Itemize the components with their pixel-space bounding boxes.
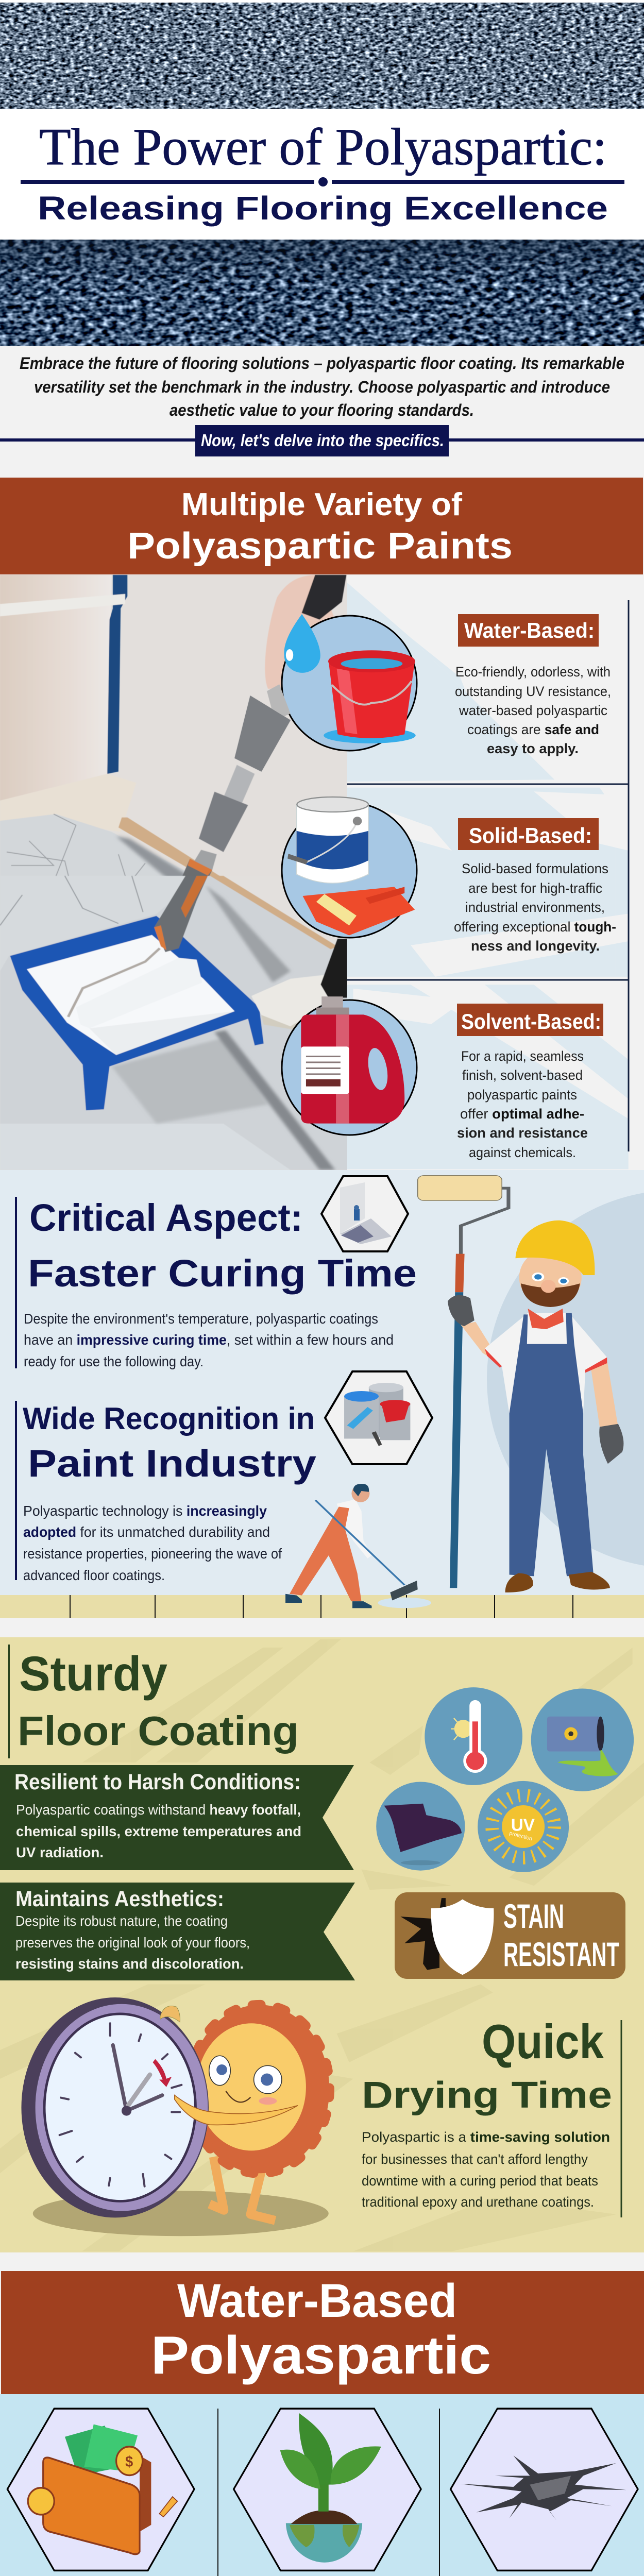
text: solvent-based: polyaspartic paints (467, 1087, 577, 1103)
intro text: aesthetic value to your flooring standards. (170, 401, 474, 419)
text: solvent-based: offer optimal adhe- (460, 1106, 584, 1122)
badge: stain resistant: STAIN (503, 1897, 564, 1935)
hero photo: bottom stone texture (0, 240, 644, 346)
icon: bucket with water (282, 614, 417, 751)
text: solid-based: offering exceptional tough- (454, 919, 616, 935)
text: solvent-based (457, 1048, 588, 1160)
item: solid-based (282, 797, 616, 954)
badge: stain resistant (395, 1892, 625, 1979)
ribbon: resilient to harsh conditions: Polyaspartic coatings withstand heavy footfall, (16, 1802, 301, 1818)
text: quick drying time: for businesses that can't afford lengthy (362, 2151, 588, 2167)
banner: multiple variety: Multiple Variety of (181, 487, 462, 522)
heading: critical aspect (15, 1196, 417, 1368)
label: solid-based (458, 818, 599, 850)
heading: quick drying time: Drying Time (362, 2075, 612, 2116)
text: wide recognition: advanced floor coatings. (23, 1567, 165, 1583)
divider with specifics label: Now, let's delve into the specifics. (201, 431, 444, 450)
text: solid-based: Solid-based formulations (462, 861, 608, 876)
icon: thermometer (425, 1687, 522, 1785)
banner: multiple variety: Polyaspartic Paints (127, 526, 513, 567)
label: water-based: Water-Based: (464, 618, 595, 642)
photo: roller in paint tray (0, 575, 347, 1170)
heading: wide recognition: Wide Recognition in (23, 1401, 315, 1436)
text: water-based (455, 664, 611, 756)
text: solvent-based: against chemicals. (469, 1145, 576, 1160)
icon: red bottle (282, 996, 417, 1135)
title panel (0, 109, 644, 240)
decorative circle (487, 1190, 644, 1568)
text: water-based: easy to apply. (487, 741, 579, 756)
text: wide recognition (23, 1503, 282, 1583)
illustration: worker mopping (285, 1484, 431, 1608)
divider with specifics label (0, 425, 644, 456)
text: solid-based (454, 861, 616, 954)
label: solvent-based (457, 1004, 603, 1036)
ribbon: maintains aesthetics: preserves the original look of your floors, (15, 1935, 250, 1951)
clock (21, 1997, 298, 2217)
text: water-based: water-based polyaspartic (459, 703, 607, 718)
roller grip over circle (234, 685, 291, 772)
painter head with helmet (515, 1221, 595, 1307)
column: environmental-friendly (227, 2409, 433, 2576)
text: water-based: outstanding UV resistance, (455, 684, 611, 699)
icon: UV protection: protection (509, 1831, 533, 1842)
floor strip (0, 1595, 644, 1618)
text: wide recognition: resistance properties, pioneering the wave of (23, 1546, 282, 1562)
ribbon: maintains aesthetics (0, 1883, 355, 1980)
label: water-based (458, 614, 599, 647)
column: less sturdy (451, 2409, 638, 2576)
ribbon: maintains aesthetics: resisting stains and discoloration. (15, 1956, 244, 1972)
heading: wide recognition: Paint Industry (28, 1442, 316, 1485)
item: water-based (282, 614, 611, 756)
heading: sturdy floor coating: Floor Coating (18, 1708, 299, 1754)
icon: hexagon worker in room (321, 1176, 408, 1251)
ribbon: resilient to harsh conditions: Resilient to Harsh Conditions: (14, 1770, 301, 1794)
heading: quick drying time: Quick (482, 2014, 604, 2069)
illustration: sun and clock (21, 1997, 329, 2236)
heading: wide recognition (15, 1401, 316, 1580)
text: solvent-based: finish, solvent-based (462, 1067, 583, 1083)
icon: plant on globe (234, 2409, 421, 2570)
text: quick drying time: Polyaspartic is a time-saving solution (362, 2129, 610, 2145)
ribbon: resilient to harsh conditions: UV radiation. (16, 1844, 104, 1860)
illustration: painter with roller (418, 1176, 623, 1592)
item: solvent-based (282, 996, 603, 1160)
text: water-based: Eco-friendly, odorless, with (455, 664, 611, 680)
text: solvent-based: For a rapid, seamless (461, 1048, 584, 1064)
banner: water-based polyaspartic: Polyaspartic (151, 2326, 491, 2385)
text: quick drying time (362, 2129, 610, 2210)
text: wide recognition: Polyaspartic technology is increasingly (23, 1503, 267, 1519)
text: solid-based: are best for high-traffic (468, 880, 602, 896)
icon: UV protection (478, 1781, 569, 1872)
panel: curing time and recognition (0, 1170, 644, 1618)
icon: floor crack (451, 2409, 638, 2570)
heading: sturdy floor coating (8, 1645, 299, 1758)
text: water-based: coatings are safe and (467, 722, 599, 737)
label: solvent-based: Solvent-Based: (461, 1009, 601, 1033)
panel: paint types (282, 575, 644, 1170)
painter roller (418, 1176, 509, 1588)
icon: wallet: $ (125, 2453, 133, 2470)
text: quick drying time: traditional epoxy and urethane coatings. (362, 2194, 594, 2210)
column: cost-effective (3, 2409, 206, 2576)
icon: UV protection: UV (511, 1816, 535, 1835)
text: critical aspect: have an impressive curing time, set within a few hours and (24, 1332, 394, 1348)
icon: wallet (7, 2409, 194, 2570)
text: critical aspect (24, 1311, 394, 1369)
text: solvent-based: sion and resistance (457, 1125, 588, 1141)
icons: hazard circles (376, 1687, 634, 1872)
title line 1: The Power of Polyaspartic: (39, 118, 607, 176)
heading: critical aspect: Critical Aspect: (29, 1196, 303, 1239)
ribbon: resilient to harsh conditions (0, 1765, 354, 1870)
sun character (190, 2005, 329, 2221)
heading: quick drying time (362, 2014, 622, 2217)
icon: hexagon paint cans (325, 1371, 432, 1464)
heading: sturdy floor coating: Sturdy (19, 1647, 167, 1701)
icon: toxic barrel (531, 1689, 634, 1791)
icon: paint can and tray (282, 797, 417, 938)
banner: multiple variety (0, 478, 644, 574)
text: wide recognition: adopted for its unmatched durability and (23, 1524, 270, 1540)
banner: water-based polyaspartic (1, 2271, 644, 2394)
banner: water-based polyaspartic: Water-Based (177, 2275, 457, 2327)
text: critical aspect: Despite the environment's temperature, polyaspartic coatings (24, 1311, 378, 1327)
brush strokes (0, 1639, 644, 2251)
text: quick drying time: downtime with a curing period that beats (362, 2173, 598, 2189)
icon: boot (376, 1782, 465, 1871)
ribbon: maintains aesthetics: Despite its robust nature, the coating (15, 1913, 228, 1929)
ribbon: maintains aesthetics: Maintains Aesthetics: (15, 1887, 224, 1911)
title line 2: Releasing Flooring Excellence (38, 190, 608, 227)
intro text (20, 354, 624, 419)
heading: critical aspect: Faster Curing Time (28, 1252, 417, 1295)
panel: sturdy floor coating (0, 1637, 644, 2252)
text: solid-based: ness and longevity. (471, 938, 600, 954)
text: solid-based: industrial environments, (465, 900, 605, 915)
panel: water-based columns (0, 2394, 644, 2576)
painter figure (448, 1295, 623, 1592)
text: critical aspect: ready for use the following day. (24, 1353, 204, 1369)
title divider (21, 177, 624, 187)
ribbon: resilient to harsh conditions: chemical spills, extreme temperatures and (16, 1823, 301, 1839)
label: solid-based: Solid-Based: (469, 823, 592, 848)
hero photo: top stone texture (0, 0, 644, 109)
